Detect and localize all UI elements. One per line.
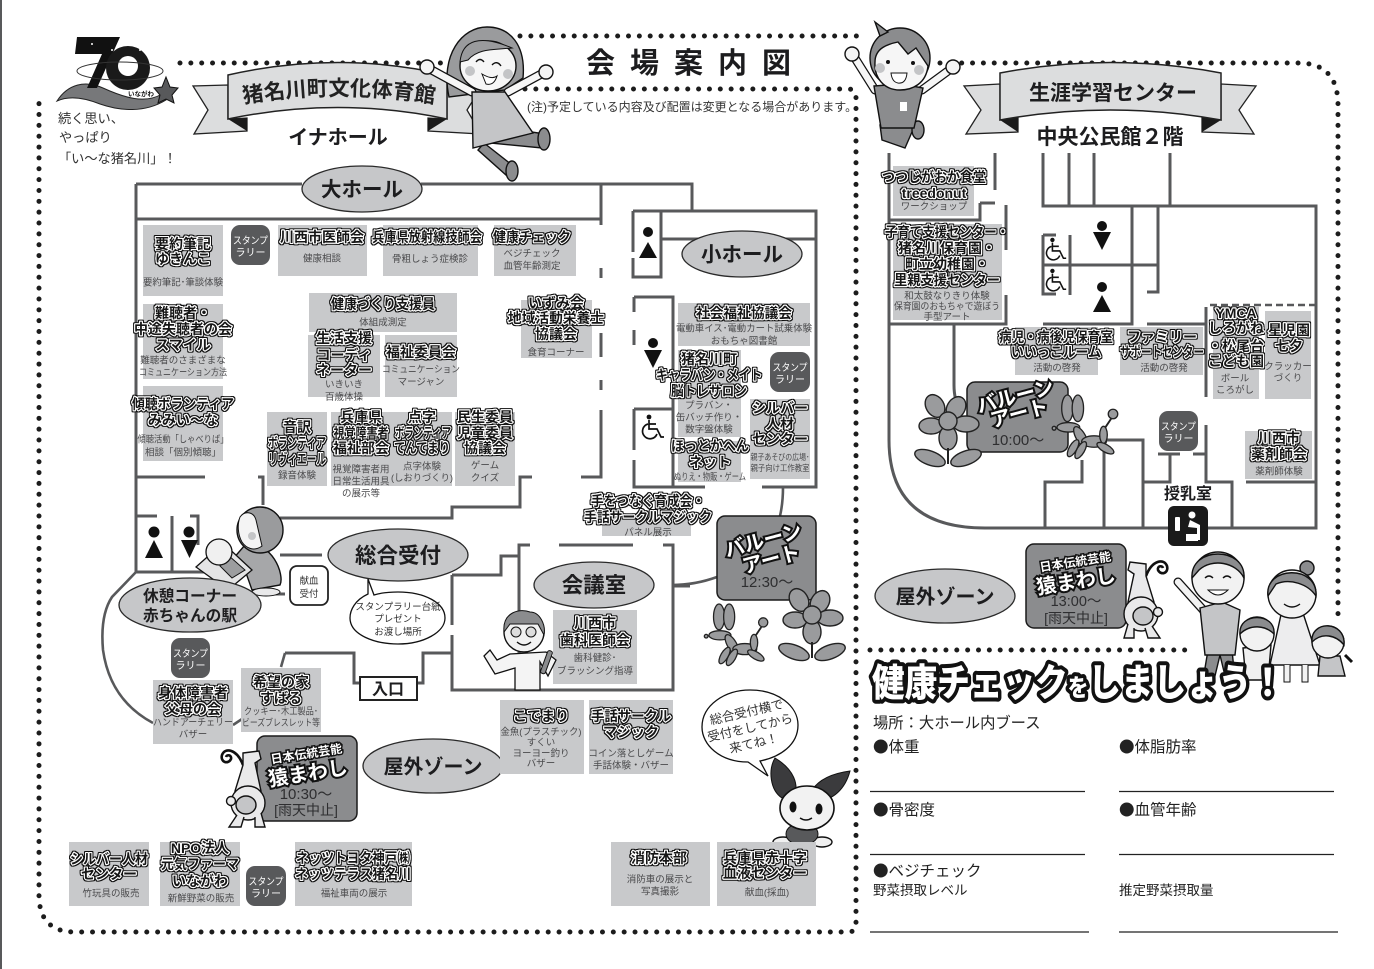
booth: 星児園 七夕: クラッカー [1264,362,1312,372]
booth: ほっとかへんネット: ほっとかへん [671,438,749,454]
booth: こでまり: バザー [527,758,555,770]
booth: 子育て支援センター: 猪名川保育園・ [898,240,996,256]
booth: 手話サークルマジック: マジック [603,724,659,740]
booth: 生活支援コーディネーター [308,330,380,403]
booth: 子育て支援センター: 子育て支援センター・ [885,224,1009,240]
booth: こでまり: こでまり [513,708,569,724]
booth: 健康づくり支援員: 健康づくり支援員 [331,296,435,312]
booth: 子育て支援センター: 保育園のおもちゃで遊ぼう [894,300,1000,312]
callout: スタンプラリー台紙: スタンプラリー台紙 [355,601,441,613]
subtitle: イナホール: イナホール [288,127,388,149]
slogan [58,111,177,166]
health checklist [870,735,1338,932]
oval: 休憩コーナー [119,578,261,632]
booth: NPO法人元気ファーマ [160,840,240,906]
booth: 民生委員: 児童委員 [457,425,513,441]
booth: シルバー人材センター 竹玩具 [69,842,149,906]
booth: ネッツトヨタ神戸 [295,842,412,906]
stamp rally [171,638,210,678]
booth: 難聴者: コミュニケーション方法 [139,366,227,378]
icon: wheelchair [643,415,664,439]
heading: 会場案内図: 会場案内図 [586,47,806,80]
booth: 視覚障害者 / 点字: 日常生活用具 [332,476,390,488]
panel: バルーンアート 12:30: バルーン [722,519,804,562]
booth: NPO法人元気ファーマ: NPO法人 [171,840,229,856]
booth: 星児園 七夕 [1264,311,1312,399]
booth: 川西市薬剤師会: 薬剤師体験 [1255,466,1303,478]
panel: 猿まわし 10:30: [雨天中止] [274,802,338,818]
booth: 福祉委員会: 福祉委員会 [386,344,456,360]
booth: いずみ会: 地域活動栄養士 [508,310,604,326]
booth: 傾聴ボランティア: 傾聴活動「しゃべりば」 [138,434,228,446]
panel: 猿まわし 13:00: 日本伝統芸能 [1039,549,1112,575]
illustration: balloon flower [777,585,847,664]
page edge [0,0,2,969]
booth: シルバー人材センター 竹玩具: シルバー人材 [70,851,148,867]
booth: こでまり: ヨーヨー釣り [512,748,570,760]
booth: 身体障害者父母の会: ハンドアーチェリー [153,718,233,728]
booth: YMCA: こども園 [1208,353,1264,369]
booth: シルバー人材センター: シルバー [752,400,808,416]
booth: 子育て支援センター: 和太鼓なりきり体験 [904,290,990,302]
booth: NPO法人元気ファーマ: 新鮮野菜の販売 [168,892,234,904]
booth: 傾聴ボランティア: 傾聴ボランティア [132,396,234,412]
booth: YMCA: ・松尾台 [1208,338,1264,354]
illustration: monkey [222,750,265,827]
booth: 難聴者 [134,304,232,379]
booth: 希望の家すばる: ビーズブレスレット等 [242,717,320,729]
booth: 民生委員: 協議会 [464,440,506,456]
booth: 傾聴ボランティア: 相談「個別傾聴」 [145,446,221,458]
callout: スタンプラリー台紙 [350,579,445,644]
booth: 傾聴ボランティア [132,386,234,461]
booth: 傾聴ボランティア: みみい～な [148,412,218,428]
booth: 手をつなぐ育成会 [584,493,712,538]
booth: 視覚障害者 / 点字: 視覚障害者用 [332,464,390,476]
booth: 子育て支援センター: 手型アート [924,311,970,323]
callout: スタンプラリー台紙: お渡し場所 [374,626,422,638]
panel: 猿まわし 13:00 [1026,544,1126,628]
stamp rally: ラリー [775,374,805,386]
booth: 視覚障害者 / 点字: 福祉部会 [333,440,389,456]
booth: 手をつなぐ育成会: パネル展示 [624,528,672,538]
booth: ファミリーサポートセンター: ファミリー [1127,329,1197,345]
logo: 70th anniversary [57,37,178,110]
item: 推定野菜摂取量: 推定野菜摂取量 [1119,879,1214,899]
slogan: やっぱり [59,130,112,145]
booth: 視覚障害者 / 点字: 兵庫県 [340,409,382,425]
illustration: mascot [771,758,850,847]
booth: YMCA: ころがし [1216,384,1254,396]
item: 体重: ●体重 [873,735,920,757]
booth: 猪名川町キャラバン・メイト: 数字盤体験 [685,424,733,436]
booth: 兵庫県赤十字血液センター: 献血(採血) [745,886,789,898]
booth: 生活支援コーディネーター: 生活支援 [316,330,372,346]
booth: 猪名川町キャラバン・メイト: プラバン・ [685,400,733,412]
stamp rally: スタンプ [1161,421,1196,433]
booth: 民生委員: 民生委員 [457,409,513,425]
booth: 音訳ボランティア: リヴィエール [268,451,326,467]
booth: いずみ会: 食育コーナー [527,346,585,358]
booth: シルバー人材センター [750,399,810,479]
stamp rally: スタンプ [772,362,808,374]
booth: 音訳ボランティア [267,412,327,486]
booth: 川西市薬剤師会 [1245,430,1312,479]
booth: 川西市医師会: 川西市医師会 [280,229,364,245]
panel: 猿まわし 10:30: 日本伝統芸能 [270,741,343,767]
booth: NPO法人元気ファーマ: 元気ファーマ [161,856,239,872]
booth: ファミリーサポートセンター: サポートセンター [1120,344,1204,360]
booth: 健康チェック: ベジチェック [503,248,561,260]
text: location: 場所：大ホール内ブース [873,714,1041,732]
booth: シルバー人材センター: 親子向け工作教室 [750,463,810,473]
booth: 川西市医師会 [278,225,367,276]
booth: 子育て支援センター: 町立幼稚園・ [905,256,989,272]
booth: 川西市歯科医師会: 歯科医師会 [560,632,630,648]
booth: いずみ会: 協議会 [535,326,577,342]
oval: 屋外ゾーン: 屋外ゾーン [384,756,482,778]
booth: 消防本部 [611,842,710,906]
icon: wheelchair [1046,269,1066,291]
booth: 猪名川町キャラバン・メイト [656,350,762,437]
booth: ネッツトヨタ神戸: ネッツテラス猪名川 [295,866,411,882]
illustration: doctor [484,611,556,690]
booth: 兵庫県赤十字血液センター: 血液センター [723,865,807,881]
booth: 視覚障害者 / 点字: てんてまり [394,440,450,456]
booth: 民生委員: ゲーム [471,460,499,472]
booth: 生活支援コーディネーター: 百歳体操 [325,391,363,403]
stamp rally: スタンプ [248,876,284,888]
booth: 社会福祉協議会: おもちゃ図書館 [711,335,778,347]
illustration: jumping girl [420,27,553,181]
booth: つつじがおか食堂: treedonut [902,185,967,201]
heading: 授乳室: 授乳室 [1164,485,1212,503]
booth: 社会福祉協議会: 電動車イス･電動カート試乗体験 [676,322,812,334]
booth: 健康チェック: 血管年齢測定 [503,260,561,272]
booth: つつじがおか食堂 [882,166,986,216]
banner: 猪名川町文化体育館: 猪名川町文化体育館 [242,77,436,105]
booth: 希望の家すばる: クッキー･木工製品･ [244,706,318,718]
floor plan curves [102,487,783,725]
booth: 川西市歯科医師会 [553,610,637,684]
illustration: balloon flower [913,391,983,470]
booth: 社会福祉協議会: 社会福祉協議会 [696,305,792,321]
booth: 視覚障害者 / 点字 [331,409,453,500]
booth: つつじがおか食堂: つつじがおか食堂 [882,169,986,185]
stamp rally: スタンプ [173,648,208,660]
booth: ほっとかへんネット: ネット [689,454,731,470]
illustration: balloon dog [704,604,768,667]
booth: 音訳ボランティア: ボランティア [268,435,326,451]
booth: YMCA [1208,305,1264,399]
booth: 猪名川町キャラバン・メイト: キャラバン・メイト [656,367,762,383]
booth: 社会福祉協議会 [676,303,812,347]
floor plan walls: inagawa hall [136,184,816,690]
booth: こでまり [500,700,584,774]
booth: 身体障害者父母の会: バザー [179,730,207,740]
booth: YMCA: しろがね [1208,320,1264,336]
booth: 兵庫県放射線技師会: 兵庫県放射線技師会 [372,229,482,245]
booth: 生活支援コーディネーター: ネーター [316,362,372,378]
booth: シルバー人材センター: 親子あそびの広場･ [750,452,810,462]
booth: 福祉委員会: マージャン [398,377,444,388]
note: (注)予定している内容及び配置は変更となる場合があります。 [527,99,857,114]
booth: YMCA: ボール [1221,374,1250,384]
booth: 消防本部: 消防本部 [631,850,687,866]
item: 血管年齢: ●血管年齢 [1119,798,1197,820]
panel: バルーンアート 10:00: 10:00～ [992,432,1044,449]
callout: 総合受付横で: 受付をしてから [706,711,794,745]
booth: 身体障害者父母の会: 身体障害者 [158,685,228,701]
panel: 猿まわし 13:00: 13:00～ [1051,594,1101,610]
booth: 難聴者: 中途失聴者の会 [134,321,232,337]
booth: つつじがおか食堂: ワークショップ [901,202,968,212]
item: 骨密度: ●骨密度 [873,798,935,820]
panel: 猿まわし 13:00: [雨天中止] [1044,610,1108,626]
banner: 生涯学習センター [964,62,1256,134]
booth: 病児・病後児保育室: 病児・病後児保育室 [999,329,1113,345]
booth: 手話サークルマジック: コイン落としゲーム [588,748,674,760]
oval: 休憩コーナー: 休憩コーナー [143,586,237,606]
icon: nursing room [1168,506,1208,546]
booth: 要約筆記 [143,225,223,296]
booth: シルバー人材センター: センター [752,431,808,447]
booth: いずみ会: いずみ会 [528,295,584,311]
panel: バルーンアート 10:00 [967,375,1068,452]
oval: 会議室 [534,562,654,608]
booth: 手をつなぐ育成会: 手をつなぐ育成会・ [591,493,705,509]
booth: 子育て支援センター [885,224,1009,323]
booth: 川西市薬剤師会: 川西市 [1258,430,1300,446]
toilet icons [145,221,1111,558]
booth: 健康づくり支援員: 体組成測定 [359,316,407,328]
booth: シルバー人材センター 竹玩具: センター [81,866,137,882]
stamp rally [246,866,286,906]
oval: 会議室: 会議室 [562,574,626,598]
item: ベジチェック: ●ベジチェック [873,859,982,881]
booth: 病児・病後児保育室: いいっこルーム [1011,344,1101,360]
booth: 身体障害者父母の会 [153,680,233,744]
booth: 星児園 七夕: づくり [1274,373,1302,384]
booth: 視覚障害者 / 点字: 点字体験 [403,460,441,472]
booth: 視覚障害者 / 点字: (しおりづくり) [391,473,453,484]
item: 体脂肪率: ●体脂肪率 [1119,735,1197,757]
booth: 難聴者: 難聴者のさまざまな [140,354,226,366]
booth: ファミリーサポートセンター: 活動の啓発 [1140,362,1188,374]
dashed wall [1210,304,1316,306]
panel: バルーンアート 12:30: 12:30～ [741,574,793,591]
booth: 献血受付: 受付 [299,588,319,600]
slogan: 「い～な猪名川」！ [58,151,177,166]
booth: 手をつなぐ育成会: 手話サークルマジック [584,509,712,525]
stamp rally: ラリー [236,247,266,259]
booth: 健康づくり支援員 [309,293,457,332]
booth: 病児・病後児保育室 [999,327,1113,375]
callout: 総合受付横で: 総合受付横で [708,696,785,728]
booth: 希望の家すばる: すばる [260,690,302,706]
booth: 視覚障害者 / 点字: の展示等 [342,488,380,500]
panel: 猿まわし 13:00: 猿まわし [1035,564,1117,599]
booth: ネッツトヨタ神戸: 福祉車両の展示 [321,888,387,900]
booth: 希望の家すばる [241,668,321,732]
booth: 星児園 七夕: 星児園 [1268,322,1310,338]
booth: ほっとかへんネット: ぬりえ・物販・ゲーム [674,471,746,483]
booth: 手話サークルマジック: 手話サークル [591,708,671,724]
booth: いずみ会 [508,295,604,358]
booth: 猪名川町キャラバン・メイト: 缶バッチ作り・ [676,412,742,424]
booth: 視覚障害者 / 点字: 点字 [408,409,436,425]
oval: 屋外ゾーン [363,739,503,793]
booth: 川西市薬剤師会: 薬剤師会 [1251,446,1307,462]
booth: シルバー人材センター: 人材 [766,416,794,432]
booth: 身体障害者父母の会: 父母の会 [165,701,221,717]
booth: 星児園 七夕: 七夕 [1275,338,1303,354]
booth: 難聴者: 難聴者・ [155,305,211,321]
stamp rally: ラリー [176,660,206,672]
booth: 民生委員: クイズ [471,472,500,484]
booth: 子育て支援センター: 里親支援センター [894,272,1000,288]
booth: ネッツトヨタ神戸: ネッツトヨタ神戸㈱ [296,850,410,866]
booth: こでまり: すくい [527,738,555,748]
booth: 民生委員 [455,409,515,486]
oval: 屋外ゾーン [875,569,1015,623]
booth: 兵庫県放射線技師会: 骨粗しょう症検診 [392,253,468,265]
icon: wheelchair [1046,238,1066,260]
panel: 猿まわし 10:30 [257,736,357,821]
booth: 川西市医師会: 健康相談 [303,252,341,264]
booth: 川西市歯科医師会: 川西市 [574,615,616,631]
stamp rally [1159,411,1198,451]
illustration: family [1178,552,1352,682]
booth: 献血受付: 献血 [299,575,319,587]
booth: 健康チェック: 健康チェック [493,229,571,245]
entrance: 入口: 入口 [372,682,404,698]
booth: ファミリーサポートセンター [1120,327,1204,375]
callout: 総合受付横で [702,690,798,776]
stamp rally [231,225,270,265]
panel: 猿まわし 10:30: 10:30～ [280,786,332,803]
booth: 視覚障害者 / 点字: ボランティア [395,425,451,441]
panel: バルーンアート 12:30: アート [740,542,803,578]
booth: NPO法人元気ファーマ: いながわ [172,873,228,889]
booth: 消防本部: 消防車の展示と [627,874,693,886]
booth: 福祉委員会 [382,335,460,397]
floor plan walls: lifelong learning center [889,153,1316,528]
banner: 猪名川町文化体育館 [192,62,472,135]
booth: 消防本部: 写真撮影 [641,886,679,898]
booth: ほっとかへんネット [671,438,749,483]
booth: 猪名川町キャラバン・メイト: 猪名川町 [681,351,737,367]
booth: 視覚障害者 / 点字: 視覚障害者 [334,425,388,441]
booth: 生活支援コーディネーター: コーディ [316,347,372,363]
booth: 手話サークルマジック [588,700,674,774]
logo: 70th anniversary: いながわ [128,89,154,98]
panel: バルーンアート 10:00: アート [988,396,1051,432]
oval: 屋外ゾーン: 屋外ゾーン [896,586,994,608]
stamp rally: ラリー [251,888,281,900]
heading: 健康チェックをしましょう: 健康チェックをしましょう！ [872,663,1284,705]
booth: 要約筆記: ゆきんこ [155,251,211,267]
stamp rally [770,352,810,392]
slogan: 続く思い、 [58,111,124,126]
oval: 大ホール: 大ホール [321,178,403,202]
booth: 兵庫県放射線技師会 [372,225,482,276]
panel: 猿まわし 10:30: 猿まわし [267,756,349,791]
booth: 健康チェック [493,225,576,276]
booth: 生活支援コーディネーター: いきいき [325,380,363,390]
illustration: balloon dog [1052,395,1118,460]
booth: 福祉委員会: コミュニケーション [382,364,460,376]
booth: YMCA: YMCA [1215,305,1257,321]
booth: 音訳ボランティア: 録音体験 [278,470,316,482]
illustration: mother with baby [196,507,283,596]
booth: 手話サークルマジック: 手話体験・バザー [593,760,669,772]
entrance: 入口 [360,677,417,700]
item: 野菜摂取レベル: 野菜摂取レベル [873,879,968,899]
callout: 総合受付横で: 来てね！ [728,731,780,756]
stamp rally: ラリー [1164,433,1194,445]
booth: 献血受付 [290,566,328,605]
stamp rally: スタンプ [233,235,268,247]
panel: バルーンアート 12:30 [717,516,816,600]
booth: 難聴者: スマイル [155,337,211,353]
oval: 総合受付 [328,529,468,581]
illustration: jumping boy [845,22,960,148]
booth: こでまり: 金魚(プラスチック) [500,726,582,738]
booth: 要約筆記: 要約筆記･筆談体験 [143,276,223,288]
booth: 川西市歯科医師会: 歯科健診･ [574,652,616,664]
booth: 音訳ボランティア: 音訳 [283,419,311,435]
banner: 生涯学習センター: 生涯学習センター [1029,82,1197,105]
booth: 要約筆記: 要約筆記 [155,236,211,252]
oval: 総合受付: 総合受付 [355,544,441,568]
booth: 猪名川町キャラバン・メイト: 脳トレサロン [671,383,747,399]
oval: 大ホール [302,166,422,212]
panel: バルーンアート 10:00: バルーン [974,375,1056,418]
booth: 希望の家すばる: 希望の家 [253,674,309,690]
oval: 休憩コーナー: 赤ちゃんの駅 [143,607,237,625]
booth: 兵庫県赤十字血液センター [717,842,816,906]
oval: 小ホール [682,231,802,277]
booth: 病児・病後児保育室: 活動の啓発 [1033,362,1081,374]
booth: 川西市歯科医師会: ブラッシング指導 [557,665,633,677]
callout: スタンプラリー台紙: プレゼント [374,613,422,625]
booth: 兵庫県赤十字血液センター: 兵庫県赤十字 [723,850,807,866]
illustration: monkey [1124,561,1167,638]
booth: シルバー人材センター 竹玩具: 竹玩具の販売 [82,888,140,900]
subtitle: 中央公民館2階: 中央公民館２階 [1036,126,1184,149]
oval: 小ホール: 小ホール [701,244,783,266]
